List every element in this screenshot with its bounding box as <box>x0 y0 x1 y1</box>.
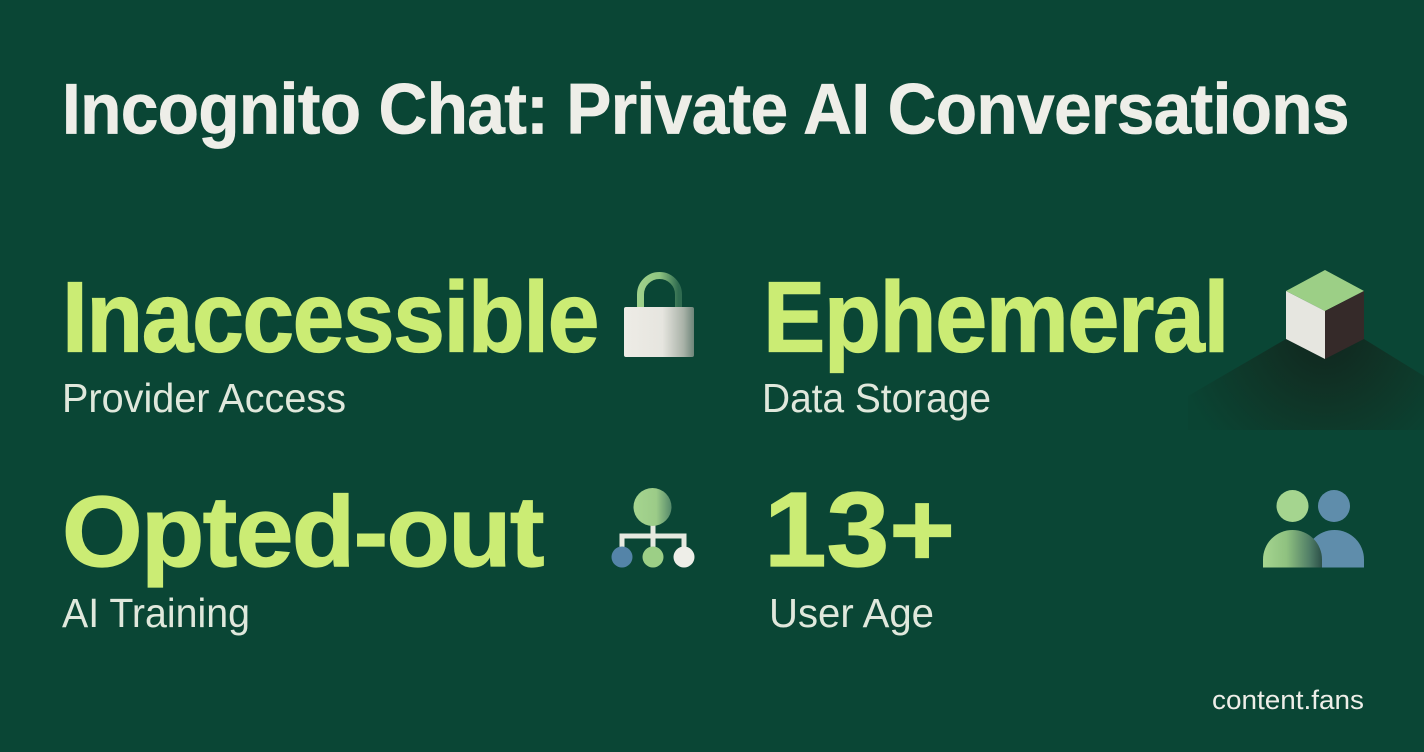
title: Incognito Chat: Private AI Conversations <box>62 70 1349 150</box>
panel: data storage <box>762 262 1424 430</box>
heading: Opted-out: Opted-out <box>62 476 544 588</box>
icon: network tree <box>612 488 694 568</box>
label: AI Training: AI Training <box>62 590 250 636</box>
icon: two people <box>1263 490 1364 568</box>
heading: Inaccessible: Inaccessible <box>62 262 598 374</box>
label: Data Storage: Data Storage <box>762 375 991 421</box>
heading: Ephemeral: Ephemeral <box>763 262 1228 374</box>
panel: provider access <box>62 262 694 421</box>
icon: padlock <box>624 276 694 357</box>
panel: user age <box>764 471 1364 636</box>
icon: cube with shadow <box>1188 270 1424 430</box>
panel: AI training <box>62 476 694 636</box>
label: User Age: User Age <box>769 590 934 636</box>
label: Provider Access: Provider Access <box>62 375 346 421</box>
footer: source: content.fans <box>1212 685 1364 715</box>
heading: 13+: 13+ <box>764 471 955 589</box>
